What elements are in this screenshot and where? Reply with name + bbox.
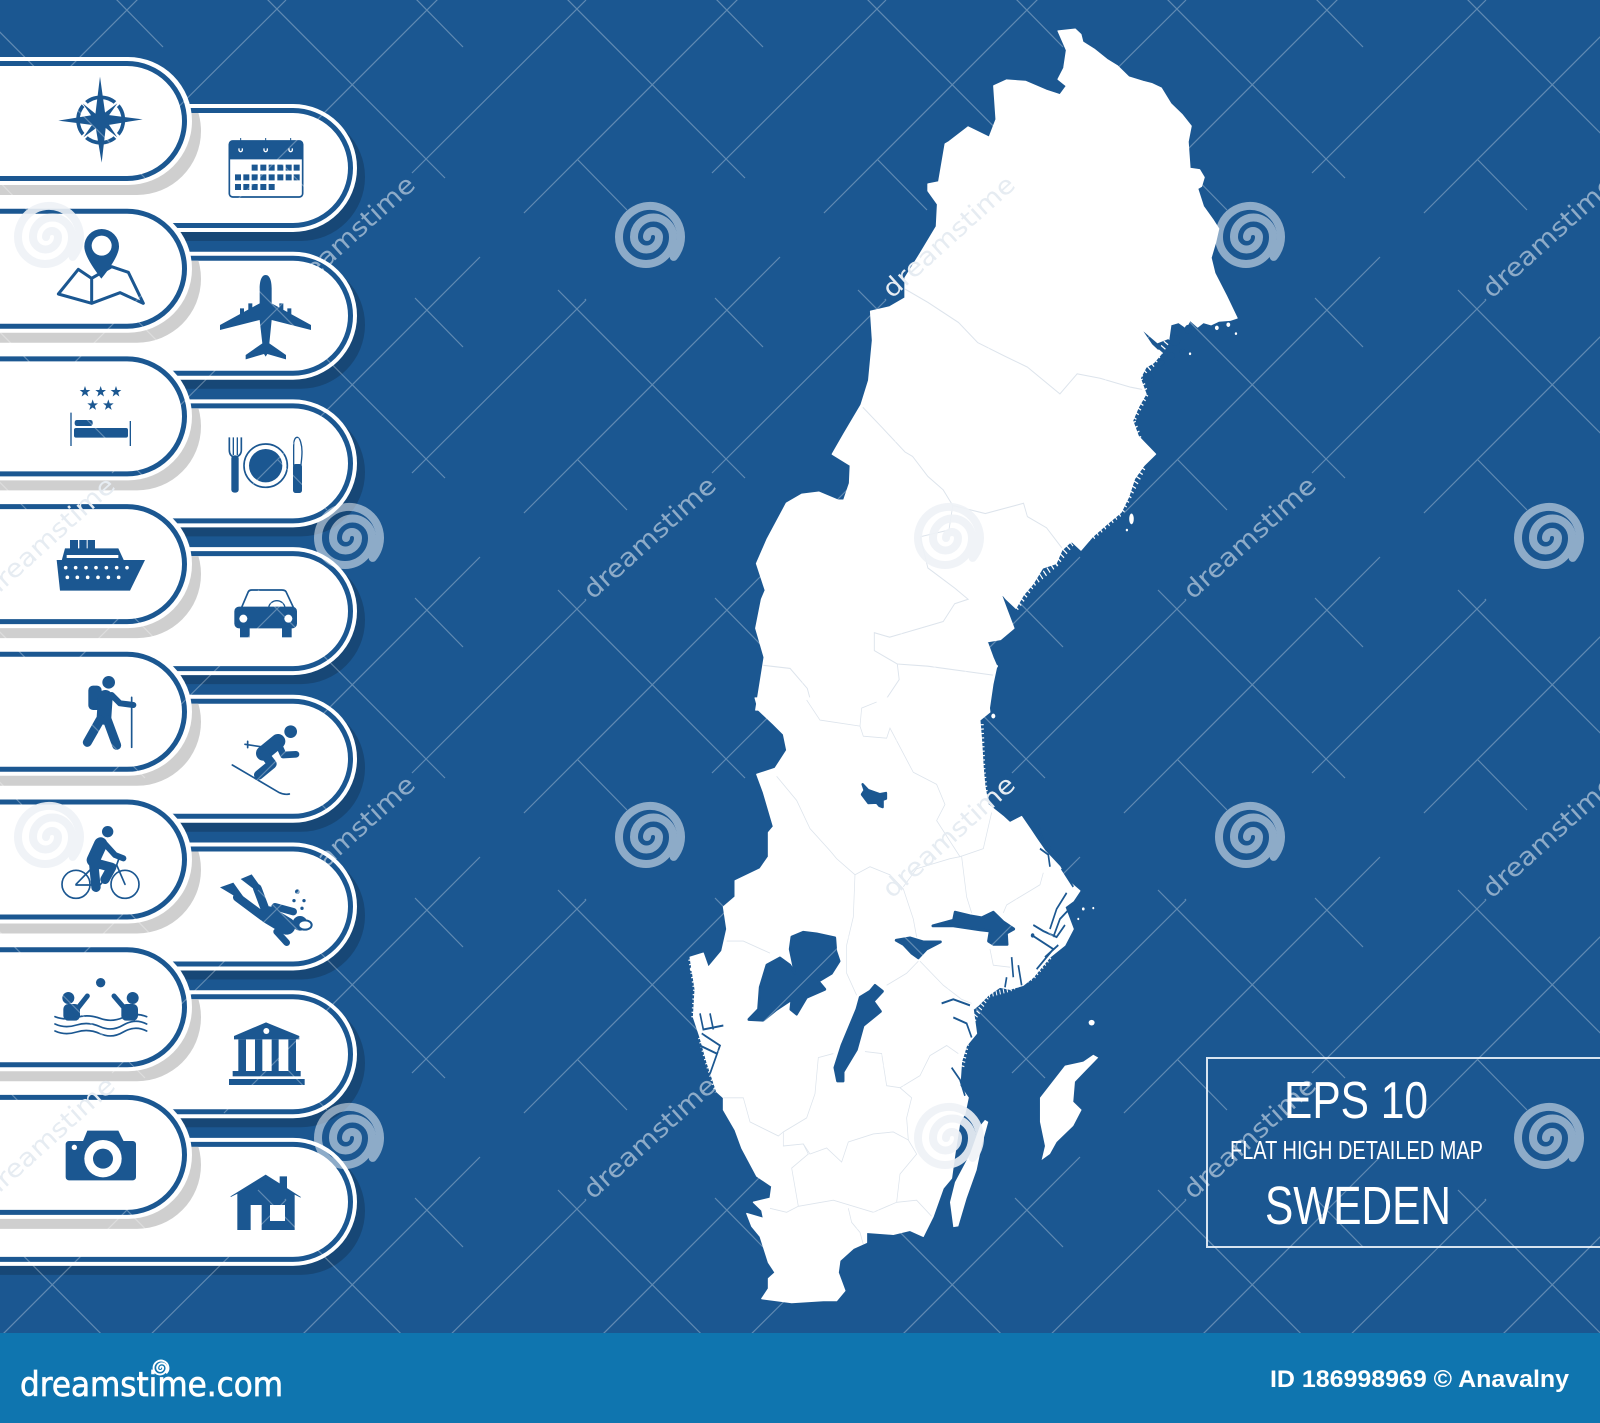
watermark overlay: dreamstime: [277, 170, 421, 304]
icon: calendar: [229, 138, 303, 197]
icons row group 4: [55, 978, 305, 1230]
icon: water polo: [55, 978, 147, 1036]
icon: car: [234, 590, 297, 637]
watermark overlay: dreamstime: [578, 1071, 722, 1205]
icon: scuba diver: [220, 874, 312, 943]
fuzzy coast north: [1016, 338, 1169, 608]
lake Vanern: [749, 932, 839, 1020]
icon: house: [231, 1175, 301, 1230]
lake Hjalmaren: [896, 938, 941, 958]
icon: museum: [229, 1022, 305, 1085]
icon panel: right column pills: [0, 104, 365, 1275]
icons row group 2: [57, 386, 302, 637]
icon: camera: [66, 1131, 136, 1180]
northern Sweden: [756, 29, 1237, 710]
lake Vattern: [835, 985, 883, 1081]
label: Sweden: SWEDEN: [1265, 1176, 1451, 1236]
county borders north: [763, 289, 1142, 710]
footer logo text: dreamstime.com: [20, 1365, 283, 1405]
footer image id and author: ID 186998969 © Anavalny: [1270, 1366, 1570, 1393]
watermark overlay: dreamstime: [877, 770, 1021, 904]
lakes: [749, 784, 1014, 1081]
icon: skier: [232, 725, 297, 794]
watermark overlay: dreamstime: [578, 471, 722, 605]
icon: map pin: [58, 229, 143, 303]
icon: hotel bed and stars: [71, 386, 130, 446]
icon: airplane: [220, 275, 311, 359]
label: flat high detailed map: FLAT HIGH DETAILED MAP: [1230, 1135, 1483, 1165]
southern Sweden: [690, 698, 1098, 1303]
Bothnian archipelago: [1143, 325, 1203, 384]
watermark overlay: dreamstime: [1178, 471, 1322, 605]
watermark overlay: dreamstime: [277, 770, 421, 904]
icon: cyclist: [62, 826, 139, 898]
coastal islets: [996, 322, 1237, 668]
icon panel: left column pill shadows: [0, 67, 201, 1229]
icon: compass: [58, 77, 143, 163]
watermark overlay: dreamstime: [1178, 1071, 1322, 1205]
info box: EPS 10 Sweden: [1207, 1058, 1600, 1247]
county borders south: [723, 700, 1043, 1244]
watermark overlay: dreamstime: [877, 170, 1021, 304]
icon: plate and cutlery: [229, 437, 302, 493]
label: EPS 10: EPS 10: [1284, 1072, 1428, 1130]
icon: cruise ship: [57, 540, 145, 591]
icons row group 3: [62, 676, 312, 943]
icon: hiker: [87, 676, 133, 747]
icons row group 1: [58, 77, 311, 359]
coastal inlets: [700, 825, 1073, 1096]
icon panel: left column pills: [0, 57, 192, 1219]
fuzzy coast south: [690, 724, 1050, 1092]
lake Malaren: [933, 912, 1014, 944]
footer bar: [0, 1333, 1600, 1423]
islands Oland Gotland Faro: [690, 714, 1098, 1227]
footer logo spiral: [154, 1361, 168, 1374]
lake Siljan: [862, 784, 886, 807]
map of Sweden: [690, 29, 1237, 1303]
